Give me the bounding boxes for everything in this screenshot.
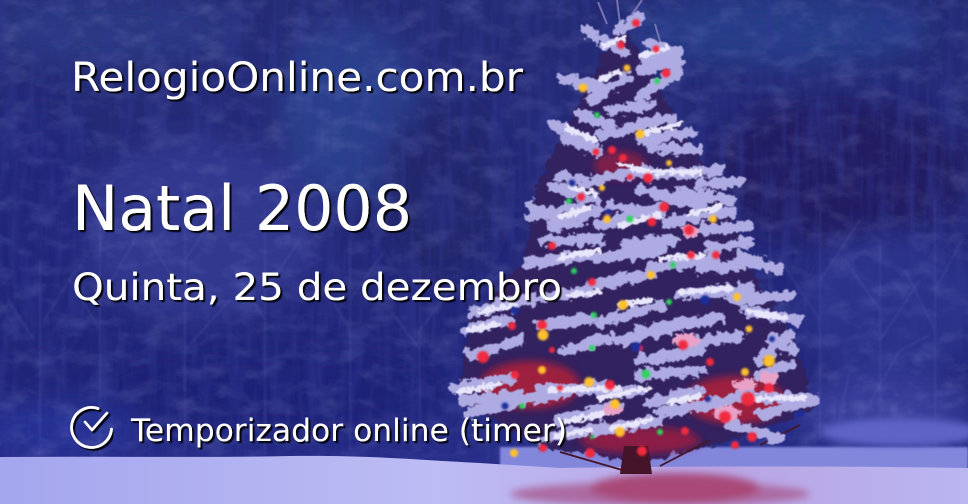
site name: RelogioOnline.com.br — [71, 55, 524, 101]
distant snow band — [500, 447, 968, 472]
timer label: Temporizador online (timer) — [130, 413, 567, 449]
red inner glow — [480, 151, 785, 454]
christmas tree — [456, 0, 815, 474]
top twigs — [598, 0, 662, 48]
snow highlights — [460, 38, 805, 436]
snow ground — [0, 456, 968, 504]
bare winter branches — [8, 180, 962, 455]
heading: event name: Natal 2008 — [72, 172, 412, 245]
string lights — [477, 19, 804, 458]
icon: clock with check mark — [72, 407, 112, 447]
tree body — [458, 25, 815, 462]
mound of earth under the tree — [510, 473, 810, 504]
pink lit snow patches — [602, 225, 778, 421]
trunk — [620, 446, 652, 474]
date: Quinta, 25 de dezembro — [72, 266, 562, 309]
snowy branches, broad lavender layer — [456, 18, 815, 440]
